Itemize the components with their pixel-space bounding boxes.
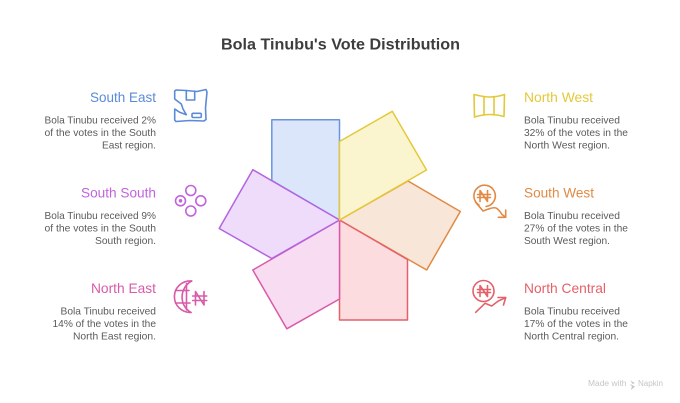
- icon: naira with falling arrow: [474, 185, 506, 217]
- text: South South: Bola Tinubu received 9%: [44, 210, 156, 222]
- text: South East: of the votes in the South: [44, 127, 156, 139]
- footer: made with Napkin: Napkin: [638, 379, 663, 388]
- icon: globe with naira: [174, 281, 207, 312]
- text: South East: East region.: [102, 140, 156, 152]
- panel: South East: [44, 89, 207, 152]
- petal: South West: [340, 181, 460, 270]
- heading: North West: North West: [524, 89, 593, 105]
- heading: North East: North East: [91, 280, 156, 296]
- panel: South South: [44, 185, 206, 247]
- petal: North East: [253, 220, 340, 329]
- footer: made with Napkin: [588, 379, 663, 390]
- footer: made with Napkin: Made with: [588, 379, 626, 388]
- petal: North West: [340, 111, 426, 220]
- panel: South West: [474, 185, 628, 247]
- heading: South West: South West: [524, 185, 594, 201]
- panel: North East: [52, 280, 207, 342]
- text: South West: Bola Tinubu received: [524, 210, 620, 222]
- panel: North West: [474, 89, 628, 152]
- heading: North Central: North Central: [524, 280, 606, 296]
- petal chart: [219, 111, 460, 329]
- text: North West: [524, 115, 628, 152]
- text: North East: North East region.: [73, 330, 156, 342]
- text: South South: [44, 210, 156, 247]
- text: North West: North West region.: [524, 140, 610, 152]
- text: North Central: North Central region.: [524, 330, 619, 342]
- text: South West: 27% of the votes in the: [524, 222, 628, 234]
- petal: South East: [272, 120, 340, 220]
- text: North East: Bola Tinubu received: [60, 305, 156, 317]
- text: South South: South region.: [95, 235, 156, 247]
- text: South West: [524, 210, 628, 247]
- text: North East: 14% of the votes in the: [52, 318, 156, 330]
- text: North Central: 17% of the votes in the: [524, 318, 628, 330]
- icon: circles: [176, 186, 206, 216]
- petal: North Central: [340, 220, 408, 320]
- icon: folded map: [474, 94, 504, 117]
- petal: South South: [219, 170, 340, 258]
- title: Bola Tinubu's Vote Distribution: [221, 36, 460, 54]
- text: South West: South West region.: [524, 235, 610, 247]
- text: South East: [44, 115, 156, 152]
- icon: Napkin logo: [630, 380, 635, 390]
- text: North West: 32% of the votes in the: [524, 127, 628, 139]
- text: South South: of the votes in the South: [44, 222, 156, 234]
- panel: North Central: [473, 280, 628, 342]
- text: North Central: Bola Tinubu received: [524, 305, 620, 317]
- text: South East: Bola Tinubu received 2%: [44, 115, 156, 127]
- heading: South South: South South: [81, 185, 156, 201]
- text: North Central: [524, 305, 628, 342]
- text: North West: Bola Tinubu received: [524, 115, 620, 127]
- icon: map: [175, 90, 207, 122]
- text: North East: [52, 305, 156, 342]
- icon: naira with rising arrow: [473, 280, 506, 312]
- heading: South East: South East: [90, 89, 156, 105]
